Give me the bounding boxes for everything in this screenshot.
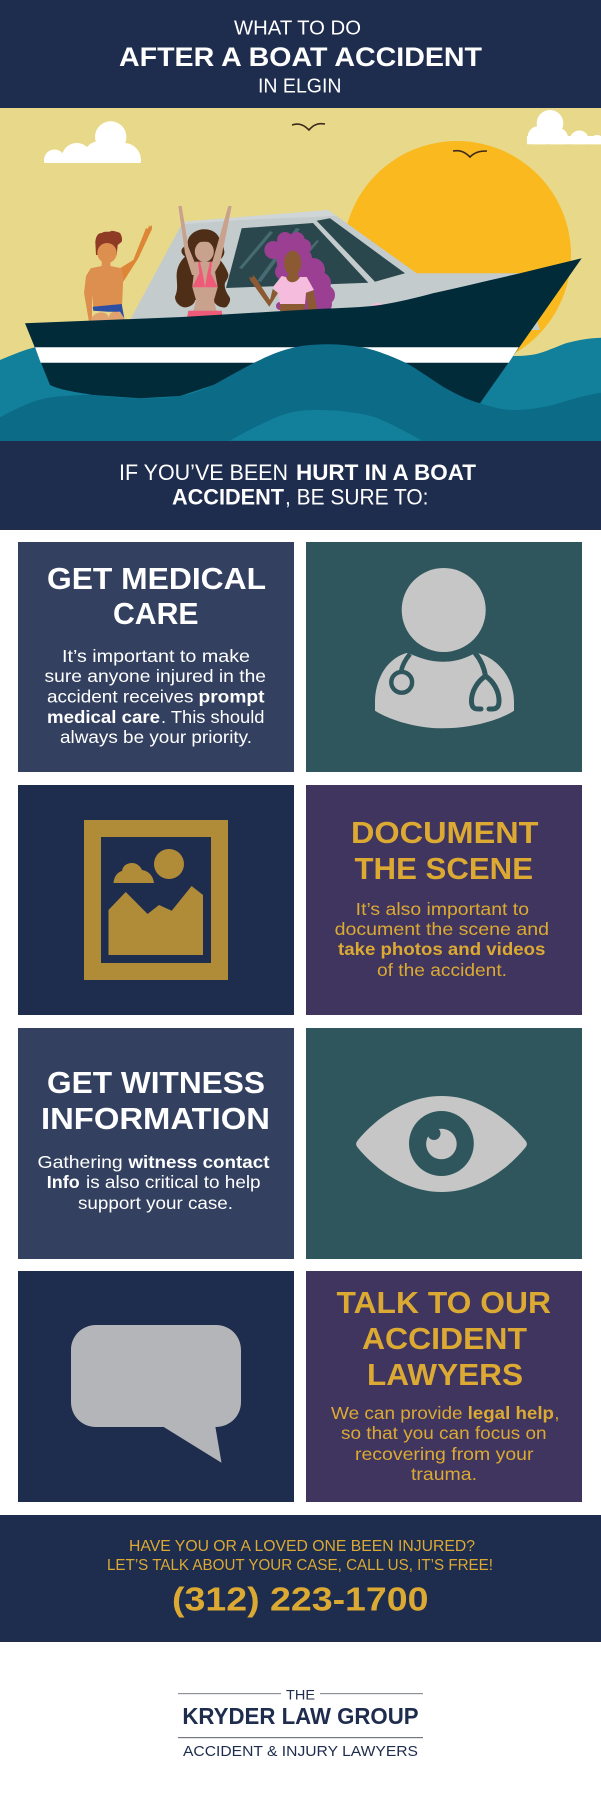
body text [331, 1403, 559, 1484]
heading: CARE [113, 596, 198, 631]
foreground wave [230, 410, 422, 440]
title line 2: AFTER A BOAT ACCIDENT [119, 42, 483, 72]
intro line 1 [119, 460, 477, 485]
heading: THE SCENE [354, 851, 533, 886]
title line 3: IN ELGIN [258, 75, 342, 97]
heading: ACCIDENT [362, 1321, 527, 1356]
body text: trauma. [411, 1464, 477, 1484]
phone number: (312) 223-1700 [172, 1580, 428, 1618]
back wave [0, 338, 601, 441]
body text: witness contact [127, 1152, 270, 1172]
icon: eye [356, 1096, 527, 1192]
body text: medical care [47, 707, 160, 727]
call to action band [0, 1515, 601, 1642]
person: woman with purple hair [249, 232, 335, 313]
person: woman with raised arms [175, 206, 232, 320]
heading [47, 561, 266, 631]
heading: INFORMATION [41, 1101, 270, 1136]
icon: doctor with stethoscope [375, 568, 514, 728]
panel: image icon [18, 785, 294, 1015]
windshield [226, 223, 368, 288]
panel: speech bubble icon [18, 1271, 294, 1502]
call to action text: LET’S TALK ABOUT YOUR CASE, CALL US, IT’S FREE! [107, 1557, 493, 1574]
body text: It’s also important to [356, 899, 529, 919]
heading: TALK TO OUR [336, 1285, 551, 1320]
body text: always be your priority. [60, 727, 252, 747]
intro line 2: , BE SURE TO: [285, 484, 428, 510]
logo: the kryder law group [178, 1686, 423, 1760]
logo: the kryder law group: THE [286, 1686, 315, 1702]
body text: document the scene and [335, 919, 549, 939]
body text: We can provide [331, 1403, 463, 1423]
body text: Gathering [38, 1152, 123, 1172]
body text [38, 1152, 270, 1213]
body text: . This should [161, 707, 264, 727]
panel: document the scene [306, 785, 582, 1015]
boat cabin [129, 210, 540, 330]
body text: take photos and videos [338, 939, 546, 959]
pink spot behind hull [372, 303, 384, 309]
heading [41, 1065, 270, 1136]
body text: It’s important to make [62, 646, 250, 666]
front wave [0, 344, 601, 441]
heading: LAWYERS [367, 1357, 523, 1392]
body text: support your case. [78, 1193, 233, 1213]
body text [44, 646, 266, 747]
body text: prompt [198, 686, 265, 706]
logo: the kryder law group: ACCIDENT & INJURY LAWYERS [183, 1744, 418, 1760]
heading: DOCUMENT [351, 815, 539, 850]
icon: framed photo [84, 820, 228, 980]
intro line 2 [172, 484, 428, 510]
panel: eye icon [306, 1028, 582, 1259]
panel: doctor icon [306, 542, 582, 772]
body text: Info [47, 1172, 80, 1192]
body text: is also critical to help [86, 1172, 261, 1192]
windshield glare [239, 228, 319, 282]
heading [351, 815, 539, 886]
call to action text: HAVE YOU OR A LOVED ONE BEEN INJURED? [129, 1538, 475, 1555]
call to action text [107, 1538, 493, 1574]
cloud left [44, 121, 141, 163]
side window [317, 218, 405, 282]
bird two [453, 151, 487, 157]
heading: GET MEDICAL [47, 561, 266, 596]
cloud right [527, 110, 601, 144]
body text [335, 899, 549, 980]
intro line 2: ACCIDENT [172, 484, 285, 510]
panel: get witness information [18, 1028, 294, 1259]
panel: get medical care [18, 542, 294, 772]
logo: the kryder law group: KRYDER LAW GROUP [182, 1703, 419, 1729]
illustration: boat on the water at sunset [0, 108, 601, 441]
heading [336, 1285, 551, 1392]
intro line 1: IF YOU’VE BEEN [119, 460, 288, 485]
title line 1: WHAT TO DO [234, 18, 361, 40]
body text: of the accident. [377, 960, 507, 980]
header: title band [0, 0, 601, 108]
white hull stripe [35, 347, 519, 363]
body text: so that you can focus on [341, 1423, 547, 1443]
body text: recovering from your [355, 1444, 534, 1464]
person: man waving [84, 225, 152, 330]
body text: , [554, 1403, 559, 1423]
boat hull [25, 258, 582, 410]
intro line 1: HURT IN A BOAT [296, 460, 477, 485]
sun [343, 141, 571, 369]
heading: GET WITNESS [47, 1065, 265, 1100]
body text: sure anyone injured in the [44, 666, 266, 686]
icon: speech bubble [71, 1325, 241, 1463]
panel: talk to our accident lawyers [306, 1271, 582, 1502]
bird one [292, 124, 325, 130]
body text: accident receives [47, 686, 194, 706]
intro band [0, 441, 601, 530]
body text: legal help [468, 1403, 554, 1423]
